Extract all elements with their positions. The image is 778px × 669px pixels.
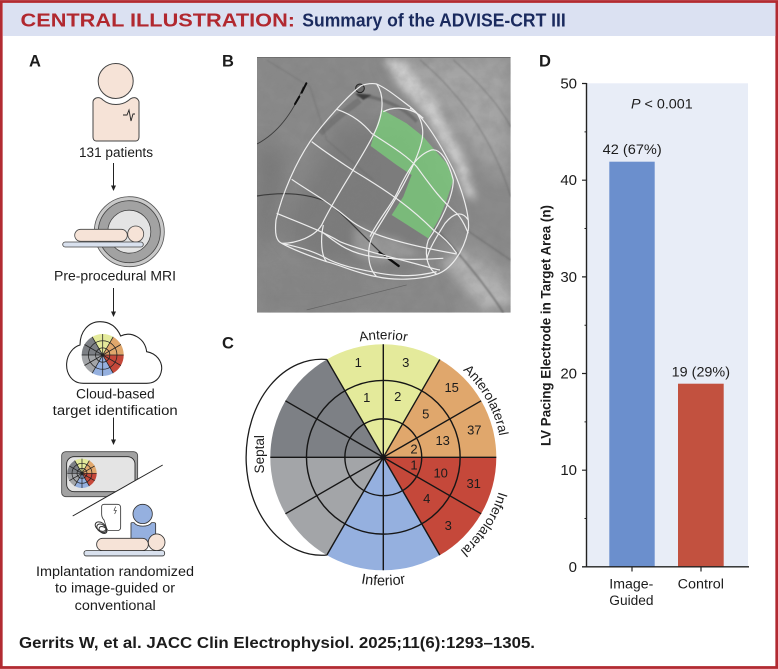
text: cloud-based target identification: Cloud-based: [76, 386, 155, 401]
segment counts: 10: [433, 466, 448, 480]
icon: cloud with polar map: [67, 322, 162, 383]
segment counts: 1: [363, 390, 370, 405]
x-axis labels: Guided: [609, 593, 654, 608]
title: summary: Summary of the ADVISE-CRT III: [302, 11, 566, 31]
region labels: Anterior: [360, 330, 408, 342]
segment counts: 37: [467, 422, 482, 438]
fluoroscopy image: [257, 57, 511, 313]
x-axis labels: [609, 576, 724, 608]
arrow: MRI to cloud: [111, 288, 116, 317]
text: implantation randomized: Implantation randomized: [36, 564, 194, 579]
segment counts: 3: [445, 518, 452, 533]
y-axis tick labels: 0: [569, 559, 577, 576]
segment counts: 2: [394, 389, 401, 404]
x-axis labels: Control: [678, 576, 724, 591]
region labels: Inferior: [362, 574, 404, 586]
target area highlight: [371, 109, 453, 238]
title: central illustration: CENTRAL ILLUSTRATION:: [20, 11, 295, 31]
plot background: [587, 83, 748, 567]
citation: Gerrits W, et al. JACC Clin Electrophysiol. 2025;11(6):1293–1305.: [19, 635, 535, 652]
segment counts: 15: [444, 380, 459, 395]
region labels: Septal: [252, 435, 267, 473]
text: cloud-based target identification: [53, 386, 178, 418]
p value: P < 0.001: [631, 95, 693, 111]
y-axis tick labels: 10: [560, 462, 577, 479]
bar: image-guided: [609, 162, 655, 567]
text: implantation randomized: conventional: [75, 598, 156, 613]
text: 131 patients: 131 patients: [79, 145, 153, 160]
y-axis tick labels: [560, 76, 577, 576]
axes: [582, 83, 749, 572]
panel C: polar map: [222, 287, 509, 586]
segment counts: 31: [466, 476, 481, 491]
septal crescent: [246, 359, 327, 555]
polar segments: [270, 344, 496, 570]
region labels: Inferolateral: [460, 492, 508, 558]
segment counts: 1: [410, 458, 418, 472]
label D: D: [539, 53, 551, 71]
panel A: study workflow: [29, 53, 194, 613]
y-axis tick labels: 50: [560, 76, 577, 92]
icon: MRI scanner: [63, 197, 164, 267]
bar: control: [678, 384, 724, 567]
segment counts: 2: [410, 442, 418, 456]
panel B: fluoroscopy image with wireframe: [222, 53, 511, 313]
arrow: cloud to implantation: [111, 418, 116, 445]
panel D: bar chart: [538, 53, 749, 608]
segment counts: 5: [422, 406, 429, 422]
LV wireframe: [276, 84, 469, 279]
y-axis tick labels: 30: [560, 269, 577, 286]
label C: C: [222, 334, 234, 352]
segment counts: 13: [435, 433, 450, 448]
text: pre-procedural MRI: Pre-procedural MRI: [54, 269, 176, 284]
y-axis tick labels: 20: [560, 366, 577, 382]
y-axis title: LV Pacing Electrode in Target Area (n): [538, 205, 554, 446]
bar value: 19 (29%): 19 (29%): [672, 364, 730, 380]
text: cloud-based target identification: target identification: [53, 403, 178, 418]
icon: patient: [93, 64, 139, 141]
bar value: 42 (67%): 42 (67%): [603, 141, 662, 157]
region labels: Anterolateral: [463, 366, 509, 436]
divider: diagonal split: [73, 465, 163, 516]
arrow: patients to MRI: [111, 163, 116, 191]
y-axis tick labels: 40: [560, 172, 577, 189]
x-axis labels: Image-: [609, 576, 653, 591]
text: implantation randomized: [36, 564, 194, 613]
region labels: [252, 330, 509, 586]
segment counts: [355, 355, 482, 533]
segment counts: 1: [355, 355, 362, 370]
icon: implantation procedure: [84, 504, 165, 556]
segment counts: 4: [423, 491, 430, 506]
header band: [3, 3, 776, 36]
segment counts: 3: [402, 355, 409, 370]
label B: B: [222, 53, 234, 71]
icon: monitor with polar map: [62, 452, 138, 497]
label A: A: [29, 53, 41, 71]
text: implantation randomized: to image-guided or: [55, 581, 176, 596]
